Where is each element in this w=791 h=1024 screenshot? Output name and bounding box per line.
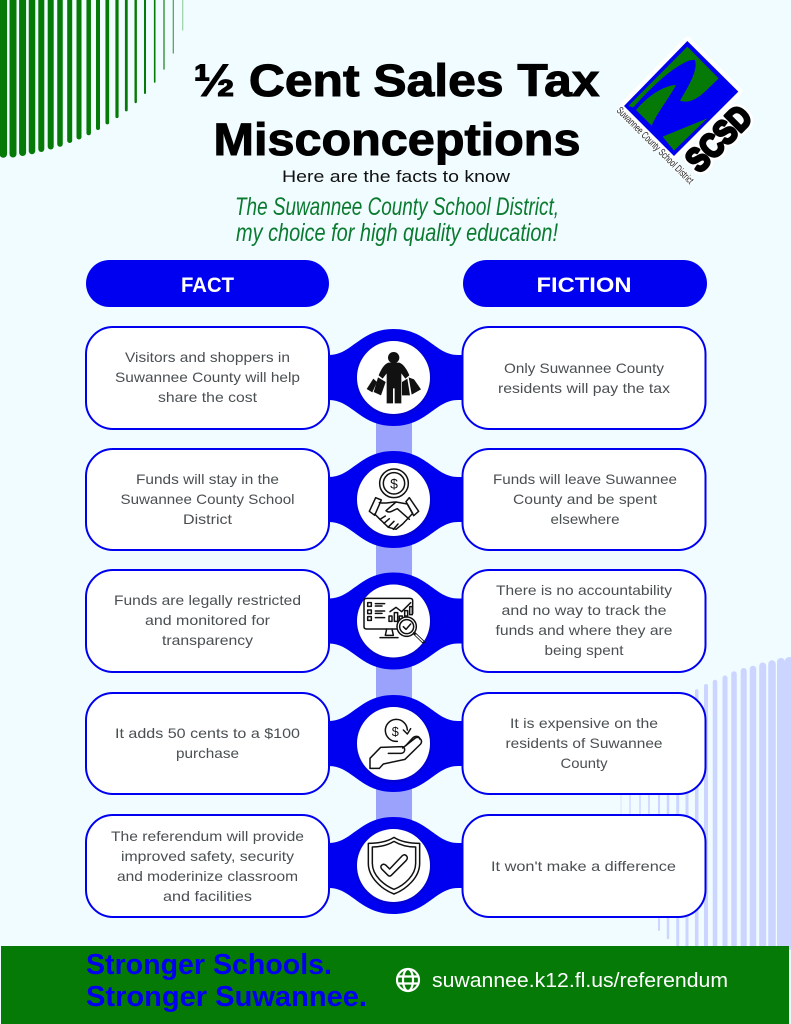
fiction card 1: Only Suwannee County <box>504 360 664 376</box>
subtitle: Here are the facts to know <box>282 168 510 186</box>
fiction card 4 <box>462 693 706 794</box>
tagline: The Suwannee County School District, <box>235 193 559 221</box>
fact card 2 <box>86 449 329 550</box>
FACT header: FACT <box>181 274 234 297</box>
fact card 2: District <box>183 511 232 527</box>
fact card 1: share the cost <box>158 389 257 405</box>
tagline <box>235 193 559 247</box>
fiction card 3: funds and where they are <box>496 622 673 638</box>
fact card 4: purchase <box>176 745 239 761</box>
fact card 5: The referendum will provide <box>111 828 304 844</box>
row 1 connector band <box>325 329 466 426</box>
FACT header <box>86 260 329 307</box>
FICTION header: FICTION <box>536 274 632 297</box>
fiction card 5 <box>462 815 706 917</box>
icon: shopper with bags <box>357 341 430 414</box>
footer slogan <box>86 949 367 1013</box>
footer slogan: Stronger Suwannee. <box>86 981 367 1013</box>
footer band <box>1 946 789 1024</box>
logo: SCSD <box>614 41 760 187</box>
icon: coin and handshake: $ <box>390 475 398 491</box>
row 5 connector band <box>325 817 466 914</box>
fact card 5: and moderinize classroom <box>117 868 298 884</box>
icon: coin and handshake <box>357 463 430 536</box>
icon: monitor with chart and magnifier <box>357 584 430 658</box>
fact card 5 <box>86 815 329 917</box>
decorative lilac bars bottom right <box>621 661 789 946</box>
fact card 3 <box>86 570 329 672</box>
fiction card 3 <box>462 570 706 672</box>
fact card 4: It adds 50 cents to a $100 <box>115 725 300 741</box>
fiction card 3: There is no accountability <box>496 582 672 598</box>
fiction card 3: and no way to track the <box>502 602 667 618</box>
fact card 2: Funds will stay in the <box>136 471 279 487</box>
fiction card 4: County <box>560 755 608 771</box>
decorative green bars top left <box>3 0 183 154</box>
fact card 2: Suwannee County School <box>120 491 294 507</box>
fact card 5: and facilities <box>163 888 252 904</box>
row 2 connector band <box>325 451 466 548</box>
logo: SCSD: Suwannee County School District <box>614 105 695 187</box>
fiction card 2 <box>462 449 706 550</box>
row 3 connector band <box>325 572 466 670</box>
logo: SCSD: SCSD <box>679 99 760 180</box>
fact card 3: and monitored for <box>145 612 270 628</box>
fact card 3: Funds are legally restricted <box>114 592 301 608</box>
fact card 5: improved safety, security <box>121 848 294 864</box>
fact card 4 <box>86 693 329 794</box>
fiction card 3: being spent <box>544 642 624 658</box>
icon: hand holding coin: $ <box>392 725 399 739</box>
title: Misconceptions <box>214 114 580 165</box>
fiction card 1: residents will pay the tax <box>498 380 670 396</box>
fiction card 2: Funds will leave Suwannee <box>493 471 677 487</box>
title <box>194 55 600 165</box>
central connector column <box>376 420 412 840</box>
fact card 1 <box>86 327 329 429</box>
fiction card 4: residents of Suwannee <box>506 735 663 751</box>
website url: suwannee.k12.fl.us/referendum <box>432 970 728 992</box>
icon: globe <box>397 969 419 991</box>
fiction card 2: County and be spent <box>513 491 657 507</box>
row 4 connector band <box>325 695 466 792</box>
fact card 3: transparency <box>162 632 253 648</box>
fact card 1: Suwannee County will help <box>115 369 300 385</box>
fiction card 2: elsewhere <box>550 511 620 527</box>
footer slogan: Stronger Schools. <box>86 949 332 981</box>
fiction card 4: It is expensive on the <box>510 715 658 731</box>
fact card 1: Visitors and shoppers in <box>125 349 290 365</box>
icon: hand holding coin <box>357 707 430 780</box>
fiction card 1 <box>462 327 706 429</box>
tagline: my choice for high quality education! <box>236 219 558 247</box>
fiction card 5: It won't make a difference <box>491 858 676 874</box>
title: ½ Cent Sales Tax <box>194 55 600 106</box>
logo: SCSD: SCSD <box>679 99 760 180</box>
icon: shield with check <box>357 829 430 902</box>
FICTION header <box>463 260 707 307</box>
